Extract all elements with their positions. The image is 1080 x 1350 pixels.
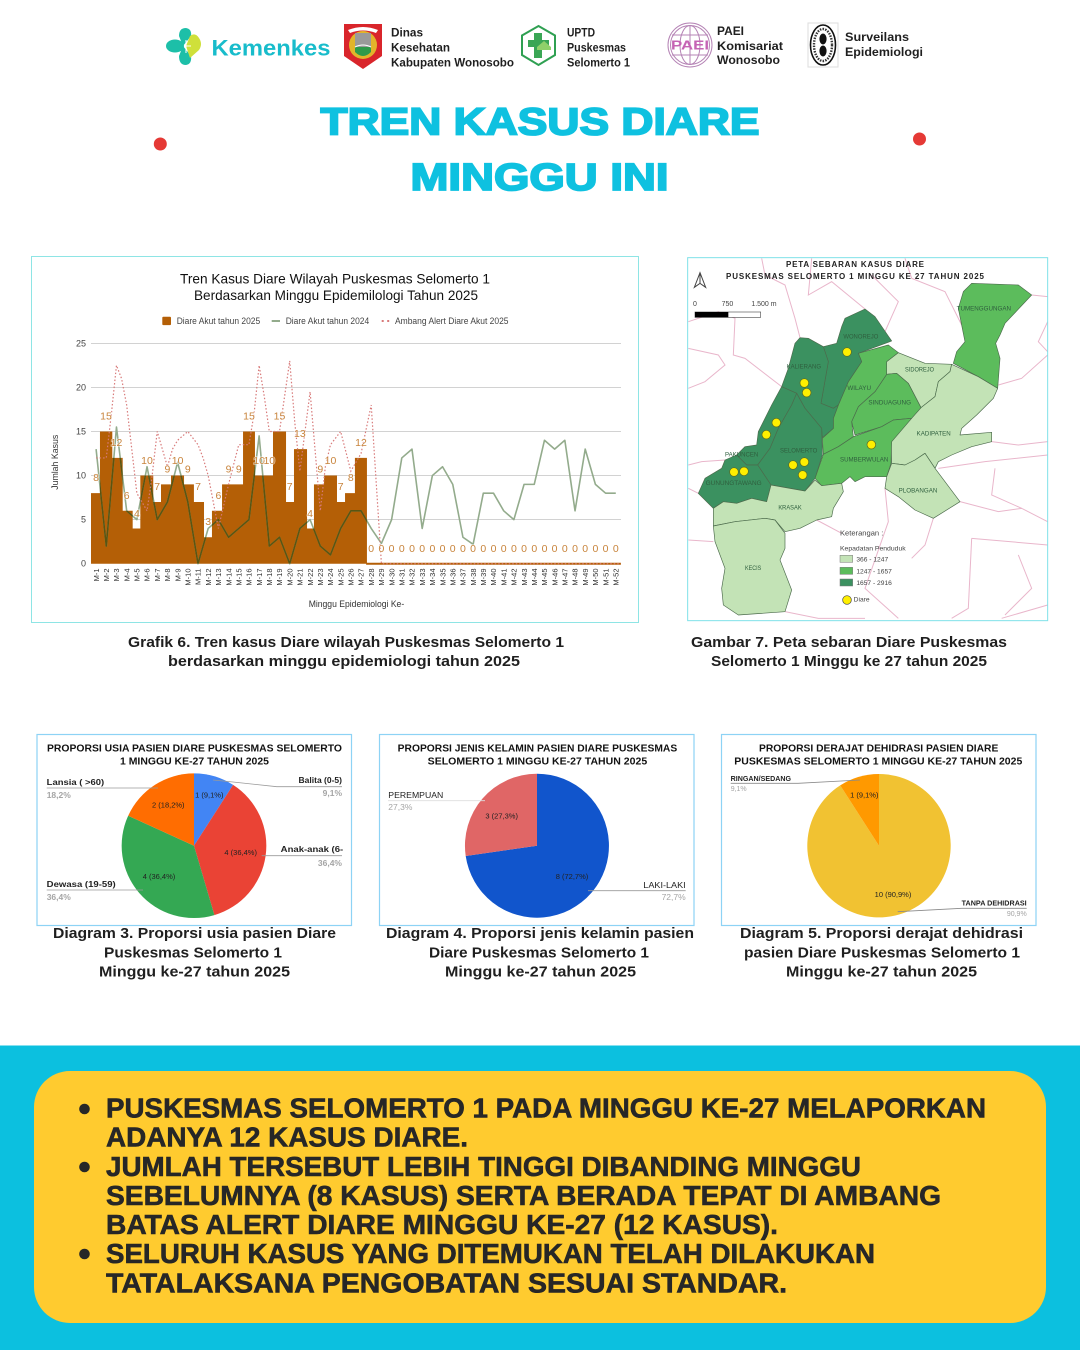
x axis week labels: M-29: [377, 568, 386, 586]
map region names: SIDOREJO: [905, 367, 934, 374]
value labels: 0: [501, 543, 507, 555]
x axis week labels: M-37: [459, 568, 468, 586]
series: plotted weekly data: [91, 361, 621, 564]
y axis ticks and gridlines: 0: [81, 558, 86, 568]
logo text: Surveilans Epidemiologi: Surveilans: [845, 30, 909, 44]
x axis title: Minggu Epidemiologi Ke-: [309, 599, 404, 609]
decorative red dot right: [913, 132, 926, 146]
value labels: 0: [613, 543, 619, 555]
map roads: [688, 258, 1048, 618]
leader lines: [47, 780, 342, 890]
callouts: 36,4%: [318, 858, 342, 868]
callouts: 72,7%: [662, 892, 686, 902]
value labels: 3: [205, 516, 211, 528]
logo text: UPTD Puskesmas: [567, 26, 630, 70]
map scale bar: 0: [693, 301, 697, 308]
value labels: 10: [253, 455, 265, 467]
slice value labels: 4 (36,4%): [143, 872, 176, 881]
x axis week labels: M-24: [326, 568, 335, 586]
map region names: WONOREJO: [843, 334, 878, 341]
value labels: 0: [409, 543, 415, 555]
logo text: Kemenkes: Kemenkes: [212, 36, 330, 60]
x axis week labels: M-1: [92, 568, 101, 581]
logo text: UPTD Puskesmas: UPTD: [567, 26, 595, 40]
value labels: 0: [419, 543, 425, 555]
caption: Diagram 3: Diagram 3. Proporsi usia pasien Diare: [53, 925, 336, 942]
slice value labels: 10 (90,9%): [875, 890, 912, 899]
map legend: Diare: [854, 597, 870, 604]
x axis week labels: M-35: [438, 568, 447, 586]
value labels: 9: [226, 464, 232, 476]
y axis ticks and gridlines: 10: [76, 470, 86, 480]
logo text: Dinas Kesehatan: Kesehatan: [391, 40, 450, 54]
caption: Diagram 3: Minggu ke-27 tahun 2025: [99, 964, 290, 980]
icon: north arrow: [694, 273, 706, 287]
finding 3: [106, 1238, 875, 1298]
callouts: [388, 790, 686, 902]
y axis ticks and gridlines: [76, 338, 621, 568]
logo text: Dinas Kesehatan: Dinas: [391, 26, 423, 40]
panel: key findings: [34, 1071, 1046, 1323]
caption: Diagram 5: pasien Diare Puskesmas Selomerto 1: [744, 944, 1020, 962]
value labels: 0: [542, 543, 548, 555]
map legend: 1247 - 1657: [856, 568, 892, 575]
y axis title: Jumlah Kasus: [50, 435, 61, 490]
value labels: 0: [480, 543, 486, 555]
x axis week labels: M-5: [133, 568, 142, 581]
value labels: 9: [236, 464, 242, 476]
slice value labels: [850, 790, 912, 899]
logo text: PAEI Komisariat: Komisariat: [717, 39, 783, 53]
map regions: [698, 283, 1032, 615]
x axis week labels: M-20: [285, 568, 294, 586]
leader lines: [388, 801, 686, 891]
finding 1: [106, 1092, 986, 1153]
leader lines: [731, 780, 1027, 912]
map region names: KRASAK: [778, 505, 802, 512]
x axis week labels: M-15: [234, 568, 244, 586]
x axis week labels: M-19: [275, 568, 284, 586]
caption: Diagram 5: Diagram 5. Proporsi derajat dehidrasi: [740, 925, 1023, 942]
slice value labels: 8 (72,7%): [556, 872, 589, 881]
y axis ticks and gridlines: 5: [81, 514, 86, 524]
map legend: [840, 529, 906, 604]
value labels: 10: [172, 455, 184, 467]
chart heading: PROPORSI DERAJAT DEHIDRASI PASIEN DIARE: [759, 744, 999, 754]
x axis week labels: M-25: [336, 568, 345, 586]
callouts: Lansia ( >60): [47, 777, 104, 787]
slice value labels: 1 (9,1%): [195, 790, 224, 800]
callouts: Dewasa (19-59): [47, 879, 116, 889]
x axis week labels: M-16: [245, 568, 254, 586]
x axis week labels: M-12: [204, 568, 213, 586]
value labels: 0: [440, 543, 446, 555]
value labels: 7: [338, 481, 344, 493]
chart heading: PROPORSI JENIS KELAMIN PASIEN DIARE PUSKESMAS: [398, 744, 678, 754]
value labels: 4: [134, 508, 140, 520]
caption: Diagram 5: [740, 925, 1023, 980]
x axis week labels: M-17: [255, 568, 264, 586]
slice value labels: 4 (36,4%): [224, 848, 257, 857]
map region names: TUMENGGUNGAN: [957, 306, 1011, 313]
value labels: 0: [521, 543, 527, 555]
x axis week labels: M-8: [163, 568, 172, 581]
x axis week labels: M-14: [224, 568, 233, 586]
value labels: 15: [100, 410, 112, 422]
footer band: [0, 1046, 1080, 1350]
panel: distribution map: [688, 258, 1048, 621]
chart heading: [398, 744, 678, 768]
x axis week labels: M-49: [581, 568, 590, 586]
map region names: SELOMERTO: [780, 448, 817, 455]
value labels: 4: [307, 508, 313, 520]
x axis week labels: M-18: [265, 568, 274, 586]
value labels: 0: [460, 543, 466, 555]
logo text: UPTD Puskesmas: Selomerto 1: [567, 56, 630, 70]
value labels: 15: [243, 410, 255, 422]
caption: Grafik 6: Grafik 6. Tren kasus Diare wilayah Puskesmas Selomerto 1: [128, 634, 564, 651]
header logo row: [166, 23, 923, 70]
callouts: 90,9%: [1007, 911, 1027, 918]
callouts: 9,1%: [731, 786, 747, 793]
value labels: 0: [378, 543, 384, 555]
value labels: 0: [450, 543, 456, 555]
value labels: 0: [429, 543, 435, 555]
value labels: 12: [355, 437, 367, 449]
decorative red dot left: [154, 138, 167, 150]
value labels: 0: [592, 543, 598, 555]
caption: Diagram 4: Minggu ke-27 tahun 2025: [445, 964, 636, 980]
x axis week labels: M-4: [122, 568, 131, 581]
bullet markers: [79, 1104, 90, 1259]
logo text: Surveilans Epidemiologi: Epidemiologi: [845, 45, 923, 59]
value labels: 13: [294, 428, 306, 440]
x axis week labels: M-9: [173, 568, 182, 581]
x axis week labels: M-51: [601, 568, 610, 586]
pie slices: [465, 774, 609, 918]
value labels: 8: [348, 472, 354, 484]
panel: gender pie chart: [380, 734, 694, 926]
x axis week labels: M-34: [428, 568, 437, 586]
finding 3: SELURUH KASUS YANG DITEMUKAN TELAH DILAKUKAN: [106, 1238, 875, 1269]
icon: PAEI globe: PAEI: [671, 38, 709, 52]
callouts: TANPA DEHIDRASI: [962, 900, 1027, 908]
value labels: 0: [399, 543, 405, 555]
finding 2: JUMLAH TERSEBUT LEBIH TINGGI DIBANDING MINGGU: [106, 1151, 861, 1182]
chart heading: [734, 744, 1023, 768]
x axis week labels: M-13: [214, 568, 223, 586]
map scale bar: 750: [722, 301, 733, 308]
value labels: 0: [389, 543, 395, 555]
value labels: 12: [111, 437, 122, 449]
logo text: Dinas Kesehatan: [391, 26, 514, 70]
slice value labels: 2 (18,2%): [152, 800, 185, 810]
callouts: Anak-anak (6-: [281, 844, 343, 854]
map region names: SINDUAGUNG: [868, 399, 911, 406]
value labels: 6: [124, 490, 130, 502]
x axis week labels: M-6: [143, 568, 152, 581]
logo text: Dinas Kesehatan: Kabupaten Wonosobo: [391, 56, 514, 70]
panel: dehydration pie chart: [722, 734, 1036, 926]
value labels: 0: [470, 543, 476, 555]
x axis week labels: M-48: [571, 568, 580, 586]
value labels: 15: [274, 410, 285, 422]
value labels: [93, 410, 619, 555]
x axis week labels: M-40: [489, 568, 498, 586]
caption: Gambar 7: Gambar 7. Peta sebaran Diare Puskesmas: [691, 634, 1007, 651]
map region names: PLOBANGAN: [899, 487, 938, 494]
caption: Diagram 3: [53, 925, 336, 980]
icon: Puskesmas hexagon: [522, 26, 555, 65]
map region names: [706, 306, 1011, 572]
chart heading: 1 MINGGU KE-27 TAHUN 2025: [120, 756, 269, 768]
caption: Diagram 4: Diare Puskesmas Selomerto 1: [429, 944, 649, 962]
map case dots: [730, 348, 876, 479]
value labels: 6: [215, 490, 221, 502]
callouts: [731, 776, 1027, 918]
x axis week labels: M-27: [357, 568, 366, 586]
value labels: 7: [154, 481, 160, 493]
map title: PUSKESMAS SELOMERTO 1 MINGGU KE 27 TAHUN 2025: [726, 272, 985, 281]
caption: Diagram 4: Diagram 4. Proporsi jenis kelamin pasien: [386, 925, 694, 942]
map title: [726, 260, 985, 281]
map region names: KADIPATEN: [917, 431, 951, 438]
caption: Grafik 6: [128, 634, 564, 670]
callouts: 9,1%: [323, 788, 342, 798]
x axis week labels: M-7: [153, 568, 162, 581]
map title: PETA SEBARAN KASUS DIARE: [786, 260, 925, 269]
icon: Kemenkes flower: [166, 28, 201, 65]
x axis week labels: M-42: [510, 568, 519, 586]
x axis week labels: M-31: [398, 568, 406, 586]
value labels: 0: [368, 543, 374, 555]
caption: Diagram 3: Puskesmas Selomerto 1: [104, 944, 282, 962]
map legend: 1657 - 2916: [856, 580, 892, 587]
x axis week labels: M-50: [591, 568, 600, 586]
callouts: 36,4%: [47, 892, 71, 902]
logo text: PAEI Komisariat: PAEI: [717, 24, 744, 38]
legend: Diare Akut tahun 2025: [177, 316, 260, 326]
slice value labels: 3 (27,3%): [485, 812, 518, 820]
chart title: [180, 270, 490, 303]
value labels: 0: [531, 543, 537, 555]
icon: Wonosobo crest: [344, 24, 382, 69]
map legend: Keterangan :: [840, 529, 883, 538]
finding 1: PUSKESMAS SELOMERTO 1 PADA MINGGU KE-27 MELAPORKAN: [106, 1092, 986, 1124]
caption: Diagram 5: Minggu ke-27 tahun 2025: [786, 964, 977, 980]
logo text: Surveilans Epidemiologi: [845, 30, 923, 59]
icon: Surveilans emblem: [808, 23, 838, 67]
callouts: 27,3%: [388, 802, 413, 812]
x axis week labels: M-41: [499, 568, 508, 586]
map legend: Kepadatan Penduduk: [840, 545, 906, 552]
value labels: 10: [141, 455, 153, 467]
y axis ticks and gridlines: 20: [76, 382, 86, 392]
value labels: 8: [93, 472, 99, 484]
title: [320, 101, 760, 199]
chart title: Berdasarkan Minggu Epidemilologi Tahun 2025: [194, 287, 478, 303]
x axis week labels: M-32: [408, 568, 417, 586]
map legend: 366 - 1247: [856, 556, 888, 563]
callouts: RINGAN/SEDANG: [731, 776, 792, 783]
map region names: PAKUNCEN: [725, 451, 759, 458]
x axis week labels: M-3: [112, 568, 121, 581]
pie slices: [807, 774, 951, 917]
value labels: 10: [325, 455, 336, 467]
y axis ticks and gridlines: 15: [76, 426, 86, 436]
caption: Diagram 4: [386, 925, 694, 980]
x axis week labels: M-10: [184, 568, 192, 586]
callouts: [47, 775, 343, 902]
title: MINGGU INI: [410, 157, 668, 199]
x axis week labels: M-21: [296, 568, 305, 586]
logo text: UPTD Puskesmas: Puskesmas: [567, 41, 626, 55]
value labels: 0: [582, 543, 588, 555]
value labels: 9: [185, 464, 191, 476]
chart heading: [47, 744, 342, 768]
map region names: WILAYU: [847, 385, 871, 392]
chart title: Tren Kasus Diare Wilayah Puskesmas Selomerto 1: [180, 270, 490, 286]
x axis week labels: M-33: [418, 568, 427, 586]
finding 3: TATALAKSANA PENGOBATAN SESUAI STANDAR.: [106, 1267, 787, 1298]
x axis week labels: M-22: [306, 568, 315, 586]
map region names: GUNUNGTAWANG: [706, 480, 762, 487]
chart heading: PUSKESMAS SELOMERTO 1 MINGGU KE-27 TAHUN 2025: [734, 756, 1023, 768]
x axis week labels: M-43: [520, 568, 529, 586]
slice value labels: 1 (9,1%): [850, 790, 879, 800]
x axis week labels: M-46: [550, 568, 559, 586]
logo text: PAEI Komisariat: [717, 24, 783, 67]
x axis week labels: M-2: [102, 568, 111, 581]
map scale bar: [693, 301, 777, 317]
map region names: SUMBERWULAN: [840, 457, 889, 464]
legend: Diare Akut tahun 2024: [286, 316, 369, 326]
x axis week labels: M-47: [560, 568, 570, 586]
value labels: 0: [511, 543, 517, 555]
finding 1: ADANYA 12 KASUS DIARE.: [106, 1122, 468, 1153]
x axis week labels: M-36: [448, 568, 457, 586]
finding 2: SEBELUMNYA (8 KASUS) SERTA BERADA TEPAT DI AMBANG: [106, 1180, 941, 1211]
value labels: 7: [195, 481, 201, 493]
x axis week labels: M-23: [316, 568, 325, 586]
x axis week labels: M-28: [367, 568, 376, 586]
callouts: PEREMPUAN: [388, 790, 443, 800]
callouts: LAKI-LAKI: [643, 880, 686, 890]
map scale bar: 1.500 m: [751, 301, 777, 308]
value labels: 0: [552, 543, 558, 555]
value labels: 0: [572, 543, 578, 555]
icon: PAEI globe: [668, 23, 712, 67]
callouts: Balita (0-5): [299, 775, 342, 785]
value labels: 7: [287, 481, 293, 493]
chart heading: PROPORSI USIA PASIEN DIARE PUSKESMAS SELOMERTO: [47, 744, 342, 754]
caption: Gambar 7: [691, 634, 1007, 670]
legend: [162, 316, 509, 326]
callouts: 18,2%: [47, 790, 71, 800]
y axis ticks and gridlines: 25: [76, 338, 86, 348]
slice value labels: [143, 790, 257, 881]
value labels: 10: [263, 455, 275, 467]
map region names: KECIS: [745, 565, 761, 572]
x axis week labels: M-38: [469, 568, 478, 586]
map region names: KALIERANG: [787, 364, 821, 371]
caption: Grafik 6: berdasarkan minggu epidemiologi tahun 2025: [168, 653, 520, 670]
x axis week labels: M-39: [479, 568, 488, 586]
panel: trend chart: [32, 256, 638, 622]
finding 2: BATAS ALERT DIARE MINGGU KE-27 (12 KASUS).: [106, 1209, 778, 1240]
x axis week labels: M-11: [194, 568, 203, 585]
x axis week labels: M-45: [540, 568, 549, 586]
legend: Ambang Alert Diare Akut 2025: [395, 316, 508, 326]
slice value labels: [485, 812, 589, 881]
value labels: 0: [491, 543, 497, 555]
value labels: 9: [164, 464, 170, 476]
caption: Gambar 7: Selomerto 1 Minggu ke 27 tahun 2025: [711, 653, 987, 670]
panel: age pie chart: [37, 734, 352, 926]
x axis week labels: M-26: [346, 568, 356, 586]
pie slices: [122, 773, 266, 918]
finding 2: [106, 1151, 941, 1240]
x axis week labels: [92, 568, 621, 586]
value labels: 0: [562, 543, 568, 555]
value labels: 9: [317, 464, 323, 476]
value labels: 0: [603, 543, 609, 555]
logo text: PAEI Komisariat: Wonosobo: [717, 53, 780, 67]
title: TREN KASUS DIARE: [320, 101, 760, 143]
x axis week labels: M-30: [387, 568, 396, 586]
x axis week labels: M-52: [612, 568, 620, 586]
x axis week labels: M-44: [530, 568, 539, 586]
chart heading: SELOMERTO 1 MINGGU KE-27 TAHUN 2025: [428, 756, 648, 768]
